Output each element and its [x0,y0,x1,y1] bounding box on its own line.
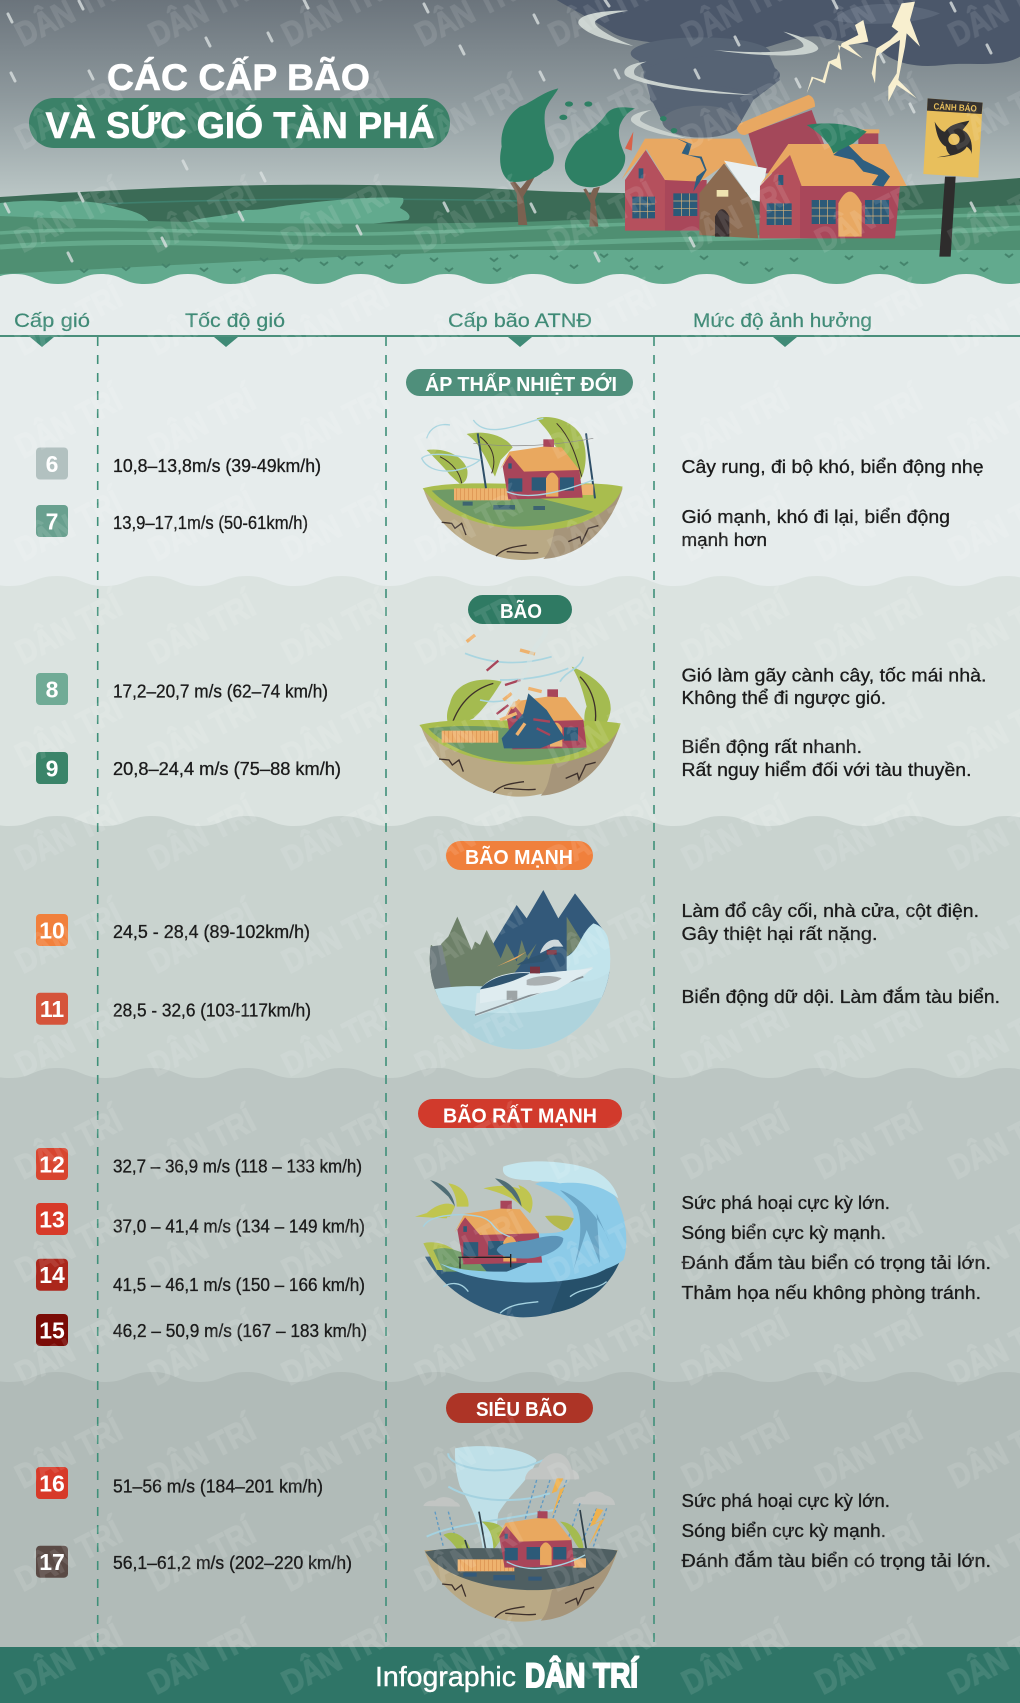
badge 8 [36,673,68,705]
column head: storm level: Cấp bão ATNĐ [448,311,592,332]
badge 17: 17 [39,1549,65,1575]
header scene [0,0,1020,300]
hills and fields [0,178,1020,300]
impact text: Gây thiệt hại rất nặng. [682,924,878,944]
badge 6 [36,448,68,480]
badge 14: 14 [39,1262,65,1288]
badge 14 [36,1259,68,1291]
rain drops [5,0,991,261]
wind speed text: 56,1–61,2 m/s (202–220 km/h) [113,1553,352,1573]
column head: wind level: Cấp gió [14,311,90,332]
badge 10: 10 [39,918,65,944]
wind speed text [113,456,367,1573]
storm cloud [557,0,1020,66]
pill: very strong storm [418,1099,622,1128]
impact text: Rất nguy hiểm đối với tàu thuyền. [682,760,972,780]
impact text: Cây rung, đi bộ khó, biển động nhẹ [682,457,984,477]
houses [622,95,907,238]
badge 12 [36,1148,68,1180]
icon: cyclone symbol [935,121,972,157]
badge 11: 11 [40,996,64,1022]
pill: super typhoon [446,1393,593,1423]
pill: tropical depression: ÁP THẤP NHIỆT ĐỚI [425,372,617,396]
illustration: very strong storm wave [415,1161,626,1317]
wind speed text: 10,8–13,8m/s (39-49km/h) [113,456,321,476]
badge 15: 15 [39,1318,65,1344]
column head: wind speed: Tốc độ gió [185,311,285,332]
pill: super typhoon: SIÊU BÃO [476,1397,567,1421]
badge 13 [36,1203,68,1235]
badge 12: 12 [39,1152,65,1178]
impact text: Đánh đắm tàu biển có trọng tải lớn. [682,1252,991,1273]
pill: storm [468,595,572,624]
column head: impact: Mức độ ảnh hưởng [693,311,872,332]
badge 16 [36,1467,68,1499]
impact text: mạnh hơn [682,530,767,550]
tornado swirls [578,11,818,138]
badge 17 [36,1546,68,1578]
badge 7 [36,505,68,537]
table header [0,311,1020,347]
badge 8: 8 [46,676,59,702]
logo: DÂN TRÍ [525,1657,639,1695]
badge 10 [36,914,68,946]
section backgrounds [0,250,1020,986]
illustration: storm island [419,627,621,797]
wind speed text: 13,9–17,1m/s (50-61km/h) [113,513,308,533]
footer bar [0,1647,1020,1703]
wind speed text: 46,2 – 50,9 m/s (167 – 183 km/h) [113,1321,367,1341]
impact text: Biển động rất nhanh. [682,737,862,757]
title line 2: VÀ SỨC GIÓ TÀN PHÁ [46,104,434,146]
wind level badges [36,448,68,1578]
badge 11 [36,993,68,1025]
badge 16: 16 [39,1470,65,1496]
badge 13: 13 [39,1206,65,1232]
panel: band 4 background [0,1068,1020,1478]
impact text: Biển động dữ dội. Làm đắm tàu biển. [682,986,1000,1007]
badge 9: 9 [46,756,58,782]
icon: left tree [500,88,558,225]
title pill [29,98,450,148]
wind speed text: 37,0 – 41,4 m/s (134 – 149 km/h) [113,1217,365,1237]
impact text: Gió mạnh, khó đi lại, biển động [682,507,950,527]
icon: right tree [559,101,677,227]
wind speed text: 24,5 - 28,4 (89-102km/h) [113,922,310,942]
impact text: Sức phá hoại cực kỳ lớn. [682,1193,890,1213]
impact text: Sóng biển cực kỳ mạnh. [682,1521,886,1541]
wind speed text: 20,8–24,4 m/s (75–88 km/h) [113,759,341,779]
badge 7: 7 [46,508,58,534]
impact text: Không thể đi ngược gió. [682,688,886,708]
icon: lightning bolts [807,2,920,102]
footer label: Infographic [375,1661,516,1692]
pill: very strong storm: BÃO RẤT MẠNH [443,1105,597,1128]
illustration: super typhoon island [423,1446,618,1622]
badge 15 [36,1314,68,1346]
wind speed text: 41,5 – 46,1 m/s (150 – 166 km/h) [113,1275,365,1295]
wind speed text: 17,2–20,7 m/s (62–74 km/h) [113,682,328,702]
illustration: depression island [422,417,623,560]
pill: strong storm [446,841,593,870]
panel: band 2 background [0,576,1020,986]
pill: strong storm: BÃO MẠNH [465,846,573,869]
wind speed text: 28,5 - 32,6 (103-117km/h) [113,1001,311,1021]
tornado funnel [631,4,940,138]
impact text: Gió làm gãy cành cây, tốc mái nhà. [682,666,986,686]
badge 6: 6 [46,451,58,477]
pill: storm: BÃO [500,600,542,623]
title line 1: CÁC CẤP BÃO [107,56,370,98]
badge 9 [36,752,68,784]
panel: band 3 background [0,816,1020,1226]
warning sign [923,98,983,257]
storm illustration [500,0,1020,257]
illustration: strong storm yacht [427,890,613,1053]
warning sign: CẢNH BÁO [933,100,977,114]
impact text: Thảm họa nếu không phòng tránh. [682,1283,981,1303]
header pointers [30,337,797,347]
impact text: Làm đổ cây cối, nhà cửa, cột điện. [682,901,979,921]
title [29,56,450,148]
icon: wavy edge of header [0,274,1020,300]
wind speed text: 32,7 – 36,9 m/s (118 – 133 km/h) [113,1157,362,1177]
panel: band 5 background [0,1372,1020,1703]
impact text: Sức phá hoại cực kỳ lớn. [682,1491,890,1511]
impact text [682,457,1000,1571]
wind speed text: 51–56 m/s (184–201 km/h) [113,1477,323,1497]
impact text: Sóng biển cực kỳ mạnh. [682,1223,886,1243]
impact text: Đánh đắm tàu biển có trọng tải lớn. [682,1550,991,1571]
